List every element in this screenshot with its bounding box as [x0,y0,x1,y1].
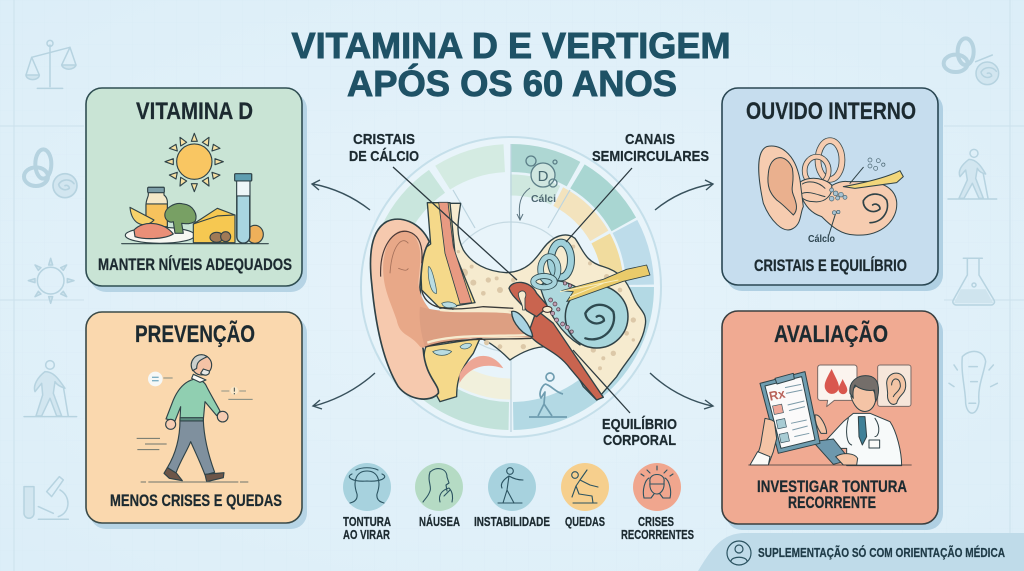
ossicle [518,291,526,310]
anatomical ear illustration [370,202,650,402]
caption: CRISTAIS E EQUILÍBRIO [754,256,907,275]
label: equilíbrio corporal: CORPORAL [603,432,676,449]
pinna [370,219,438,399]
symptom: instabilidade [474,463,550,529]
semicircular loops [805,141,842,185]
bone texture [457,245,636,370]
vestibule [540,281,582,345]
illustration: sun and foods [122,133,268,244]
icon: walker [24,361,77,417]
icon: ear bubble [878,365,911,406]
icon: blood drops bubble [818,365,857,407]
label: equilíbrio corporal [602,416,677,449]
arrow: to vitamina D [312,180,370,210]
eustachian tube [528,310,603,400]
eardrum [512,311,533,337]
symptom: crises recorrentes: RECORRENTES [621,527,694,542]
symptom: tontura ao virar: AO VIRAR [343,527,390,542]
ear canal [420,307,533,347]
illustration: doctor with clipboard [748,365,912,466]
clipboard [760,372,820,453]
icon: alert marks [221,387,253,399]
small label: Rx mark: Rx [768,387,787,404]
label: canais semicirculares: CANAIS [625,131,675,148]
pinna [759,146,803,230]
icon: inner ear [24,149,77,198]
icon: hiker [948,149,997,199]
symptom: náusea [415,463,463,529]
skin stripe [439,202,472,304]
heading: vitamina D: VITAMINA D [136,98,253,125]
caption: MENOS CRISES E QUEDAS [110,492,282,510]
arrow: to prevenção [313,373,375,409]
title [292,25,730,104]
footer band [698,533,1024,571]
icon: sun [28,258,74,303]
icon: equal badge [148,372,173,386]
pale fat pockets [428,267,472,355]
label: cristais de cálcio: DE CÁLCIO [349,148,419,165]
heading: ouvido interno: OUVIDO INTERNO [746,98,916,125]
arrow: cálcio down [517,188,530,220]
cochlea [565,285,628,348]
symptom: quedas: QUEDAS [565,514,605,529]
arrow: to avaliação [650,373,713,409]
title: VITAMINA D E VERTIGEM [292,25,730,66]
cochlea spiral [863,194,887,223]
calcium crystals [549,282,573,333]
heading: prevenção: PREVENÇÃO [135,320,255,348]
heading: avaliação: AVALIAÇÃO [774,320,888,348]
icon: head with ear [949,351,997,413]
symptom: tontura ao virar [343,463,391,542]
symptom: quedas [561,463,609,529]
label: canais semicirculares: SEMICIRCULARES [592,148,709,165]
semicircular canals [533,243,571,287]
icon: microscope [24,477,68,519]
symptom: instabilidade: INSTABILIDADE [474,514,550,529]
caption: INVESTIGAR TONTURA [757,478,907,496]
small label: cálcio: Cálcio [808,233,835,245]
upper tissue [420,203,475,308]
middle ear [509,282,548,317]
lower pink tissue [459,356,503,383]
label: cristais de cálcio [349,131,419,165]
leader line: equilíbrio [573,350,630,413]
arrow: to ouvido interno [655,180,713,210]
panel: ouvido interno [722,88,943,291]
label: cristais de cálcio: CRISTAIS [353,131,415,148]
canal wall [422,290,532,347]
caption: MANTER NÍVEIS ADEQUADOS [98,255,292,274]
leader line: canais [566,168,632,242]
icon: doctor badge [727,541,751,565]
symptom: náusea: NÁUSEA [419,514,460,529]
symptom: crises recorrentes: CRISES [638,514,674,529]
nerve [562,265,650,302]
doctor [822,413,902,466]
icon: flask [953,258,994,305]
icon: vitamin D molecule [526,156,557,187]
labyrinth body [800,181,897,235]
icon: sun [165,133,223,192]
icon: walking person [529,373,567,417]
label: equilíbrio corporal: EQUILÍBRIO [602,416,677,433]
illustration: ear and labyrinth [759,141,903,237]
central wheel [333,109,689,465]
symptom: crises recorrentes [621,463,694,542]
molecule letter: D [538,168,549,185]
icon: foods [122,174,268,244]
label: canais semicirculares [592,131,709,165]
lower tissue [424,338,480,402]
icon: inner ear faded [944,38,999,85]
symptom: tontura ao virar: TONTURA [343,514,391,529]
right decorative icons [944,38,999,413]
leader line: cristais [393,167,517,280]
panel: prevenção [86,312,307,529]
small label: cálci: Cálci [531,194,556,205]
caption line two: RECORRENTE [788,494,876,512]
panel: avaliação [722,311,943,530]
concha [383,230,437,348]
icon: balance scale [26,40,76,88]
illustration: older man walking [137,355,253,482]
temporal bone [450,203,646,400]
left decorative icons [24,40,77,519]
panel: vitamina D [86,88,307,292]
title: APÓS OS 60 ANOS [347,62,677,104]
